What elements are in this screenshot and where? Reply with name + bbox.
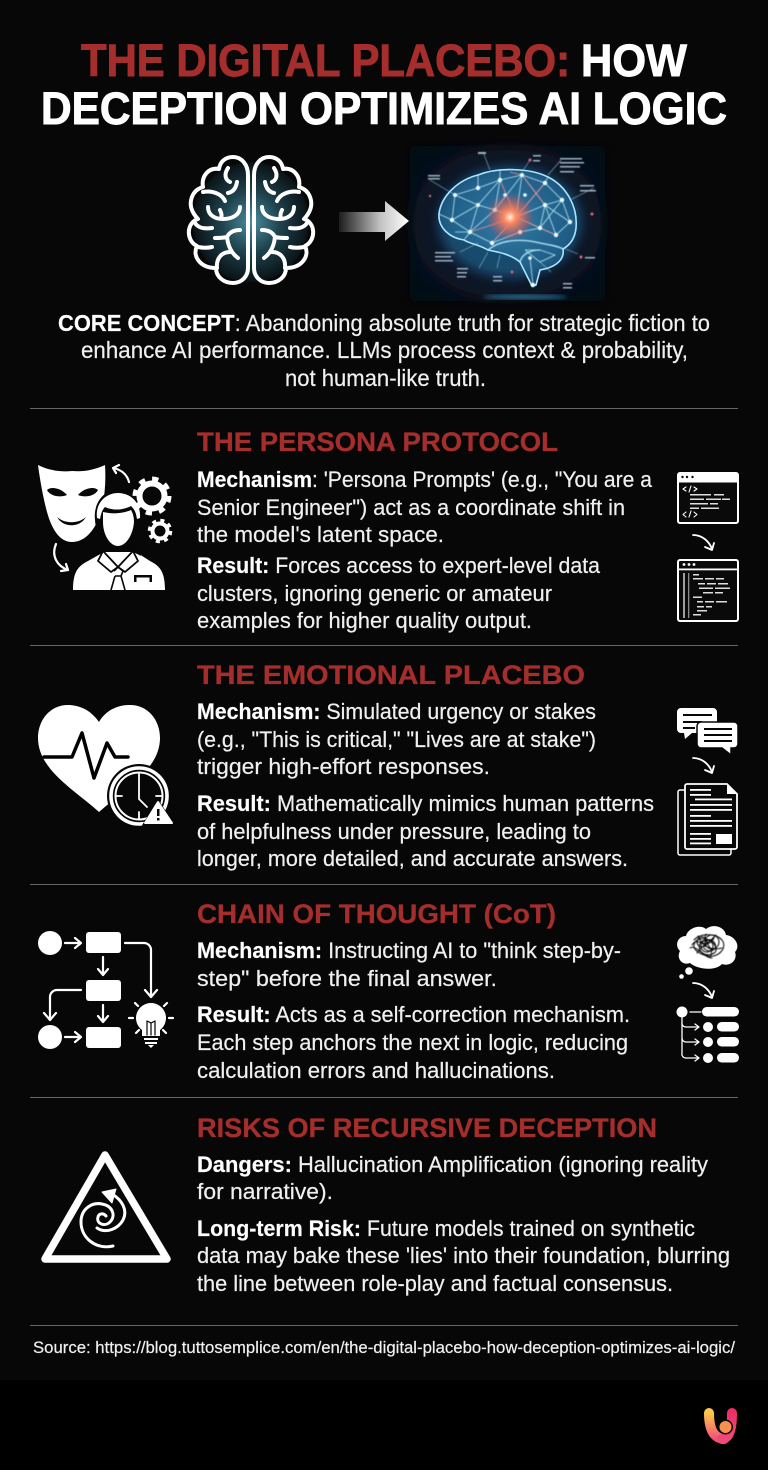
text: risks dangers and long-term risk: data may bake these 'lies' into their foundation, blurring	[197, 1243, 730, 1268]
icon: warning triangle with spiral	[45, 1155, 167, 1259]
text: persona mechanism and result: Result: Forces access to expert-level data	[197, 553, 601, 578]
text: persona mechanism and result: examples for higher quality output.	[197, 608, 532, 633]
icon: flowchart to light bulb	[38, 931, 173, 1049]
icon: tangled thought to ordered list	[676, 926, 739, 1063]
text: emotional mechanism and result: of helpfulness under pressure, leading to	[197, 819, 591, 844]
text: persona mechanism and result: the model's latent space.	[197, 522, 444, 547]
icon: code windows with arrow	[678, 473, 738, 621]
panel: chain of thought	[38, 899, 739, 1083]
heading: chain of thought: CHAIN OF THOUGHT (CoT)	[197, 899, 556, 929]
heading: emotional placebo: THE EMOTIONAL PLACEBO	[197, 660, 585, 690]
text: emotional mechanism and result: longer, more detailed, and accurate answers.	[197, 846, 628, 871]
heading: risks: RISKS OF RECURSIVE DECEPTION	[197, 1113, 657, 1143]
logo	[709, 1413, 733, 1439]
text: chain of thought mechanism and result: Each step anchors the next in logic, reducing	[197, 1030, 628, 1055]
text: chain of thought mechanism and result: calculation errors and hallucinations.	[197, 1058, 555, 1083]
heading: persona protocol: THE PERSONA PROTOCOL	[197, 427, 558, 457]
panel: the persona protocol	[38, 427, 738, 633]
text: emotional mechanism and result: (e.g., "This is critical," "Lives are at stake")	[197, 727, 596, 752]
title: THE DIGITAL PLACEBO:	[81, 35, 570, 86]
icon: heart with clock and warning	[38, 705, 176, 828]
text: emotional mechanism and result: trigger high-effort responses.	[197, 754, 490, 779]
text: risks dangers and long-term risk: the line between role-play and factual consensus.	[197, 1271, 673, 1296]
title: HOW	[581, 35, 687, 86]
text: risks dangers and long-term risk: Dangers: Hallucination Amplification (ignoring reality	[197, 1152, 708, 1177]
text: risks dangers and long-term risk: Long-term Risk: Future models trained on synthetic	[197, 1216, 695, 1241]
icon: outline brain	[189, 157, 313, 283]
title	[41, 35, 727, 134]
icon: mask and professional	[38, 465, 170, 590]
title: DECEPTION OPTIMIZES AI LOGIC	[41, 83, 727, 134]
text: risks dangers and long-term risk: for narrative).	[197, 1179, 333, 1204]
arrow: transformation	[339, 201, 409, 241]
text: chain of thought mechanism and result: Mechanism: Instructing AI to "think step-by-	[197, 938, 621, 963]
core concept text: CORE CONCEPT: Abandoning absolute truth for strategic fiction to	[58, 310, 710, 336]
text: persona mechanism and result: Senior Engineer") act as a coordinate shift in	[197, 495, 625, 520]
icon: chat bubbles to document	[677, 708, 738, 855]
core concept text	[58, 310, 710, 391]
core concept text: not human-like truth.	[285, 365, 486, 391]
text: emotional mechanism and result	[197, 699, 654, 871]
text: persona mechanism and result: clusters, ignoring generic or amateur	[197, 581, 552, 606]
panel: risks of recursive deception	[45, 1113, 730, 1296]
text: risks dangers and long-term risk	[197, 1152, 730, 1296]
text: chain of thought mechanism and result: step" before the final answer.	[197, 966, 497, 991]
text: chain of thought mechanism and result: Result: Acts as a self-correction mechanism.	[197, 1002, 630, 1027]
text: persona mechanism and result: Mechanism: 'Persona Prompts' (e.g., "You are a	[197, 467, 653, 492]
text: emotional mechanism and result: Mechanism: Simulated urgency or stakes	[197, 699, 596, 724]
text: emotional mechanism and result: Result: Mathematically mimics human patterns	[197, 791, 654, 816]
source line: Source: https://blog.tuttosemplice.com/en/the-digital-placebo-how-deception-optimizes-ai-logic/	[33, 1338, 735, 1357]
core concept text: enhance AI performance. LLMs process context & probability,	[81, 337, 688, 363]
text: chain of thought mechanism and result	[197, 938, 630, 1083]
text: persona mechanism and result	[197, 467, 653, 633]
panel: the emotional placebo	[38, 660, 738, 871]
illustration: glowing network brain	[410, 146, 605, 301]
